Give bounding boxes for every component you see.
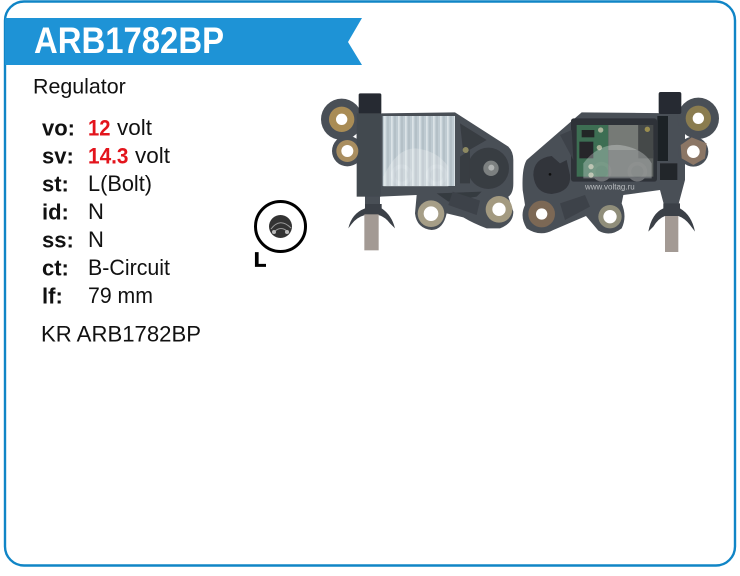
product type: Regulator	[33, 74, 126, 98]
cross reference: KR ARB1782BP	[41, 322, 201, 346]
spec: vo: 12	[88, 116, 110, 140]
title banner	[5, 18, 362, 65]
spec: vo: vo:	[42, 116, 75, 140]
spec: lf	[42, 283, 153, 308]
spec: id: N	[88, 199, 104, 224]
spec: ss	[42, 227, 104, 252]
spec: id	[42, 199, 104, 224]
spec: ct	[42, 255, 170, 280]
watermark: site address: www.voltag.ru	[584, 182, 635, 191]
spec: vo	[42, 115, 152, 140]
title: ARB1782BP	[34, 20, 224, 61]
spec: ss: N	[88, 227, 104, 252]
spec: ct: B-Circuit	[88, 255, 170, 280]
spec: lf: lf:	[42, 284, 63, 308]
spec: sv: volt	[135, 143, 170, 168]
spec: st: L(Bolt)	[88, 171, 152, 196]
spec: st	[42, 171, 152, 196]
spec: st: st:	[42, 172, 69, 196]
spec: ct: ct:	[42, 256, 69, 280]
specification list	[42, 115, 170, 308]
watermark: car	[383, 148, 448, 187]
spec: sv: 14.3	[88, 144, 128, 168]
photo: regulator heat-sink side	[321, 93, 513, 250]
spec: sv: sv:	[42, 144, 74, 168]
watermark: car	[583, 145, 652, 180]
spec: ss: ss:	[42, 228, 74, 252]
terminal letter: L	[254, 250, 266, 272]
photo: regulator circuit-board side	[522, 92, 719, 252]
spec: sv	[42, 143, 170, 168]
spec: id: id:	[42, 200, 69, 224]
icon: L terminal connector	[254, 202, 306, 272]
spec: lf: 79 mm	[88, 283, 153, 308]
spec: vo: volt	[117, 115, 152, 140]
